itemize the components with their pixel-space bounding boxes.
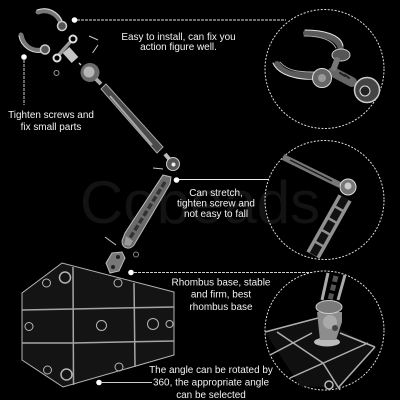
figure: exploded stand [19, 9, 180, 273]
leader line: install [72, 17, 286, 23]
detail circle: stretch joint [265, 140, 384, 260]
base knob [314, 300, 342, 389]
annotation: stretch [174, 177, 268, 220]
text: stretch: tighten screw and [177, 198, 255, 210]
text: install: Easy to install, can fix you [121, 32, 236, 43]
annotation: rhombus base [128, 270, 312, 313]
text: screws: Tighten screws and [8, 110, 94, 121]
text: rhombus: Rhombus base, stable [172, 278, 271, 288]
detail circle: clip [265, 10, 384, 128]
rhombus base plate [22, 263, 174, 387]
text: install: action figure well. [140, 42, 217, 53]
text: rhombus: rhombus base [190, 302, 253, 313]
leader line: rotation [96, 380, 152, 385]
text: rhombus: and firm, best [191, 290, 251, 300]
small screws [79, 36, 163, 257]
post [322, 273, 345, 300]
ball joint lower [165, 154, 180, 170]
annotation: install [72, 17, 286, 53]
leader line: screws [21, 54, 27, 105]
connector [54, 36, 76, 76]
annotation: rotation [96, 365, 273, 400]
text: screws: fix small parts [21, 122, 81, 133]
text: stretch: Can stretch, [189, 188, 243, 199]
detail circle: base joint [265, 271, 384, 390]
annotation: screws [8, 54, 94, 133]
leader line: stretch [174, 177, 268, 183]
clip arm upper [37, 9, 66, 30]
text: rotation: 360, the appropriate angle [153, 378, 269, 388]
text: rotation: The angle can be rotated by [149, 365, 273, 376]
rod and ladder [283, 157, 356, 255]
leader line: rhombus [128, 270, 312, 275]
clip arm lower [19, 35, 50, 54]
watermark: Cobeads [80, 169, 320, 236]
ladder arm [122, 175, 171, 248]
clip part [273, 30, 380, 102]
telescopic rod [101, 84, 163, 153]
text: stretch: not easy to fall [184, 209, 248, 220]
plate corner [265, 318, 375, 390]
ball joint upper [80, 63, 101, 84]
base joint [106, 252, 125, 273]
